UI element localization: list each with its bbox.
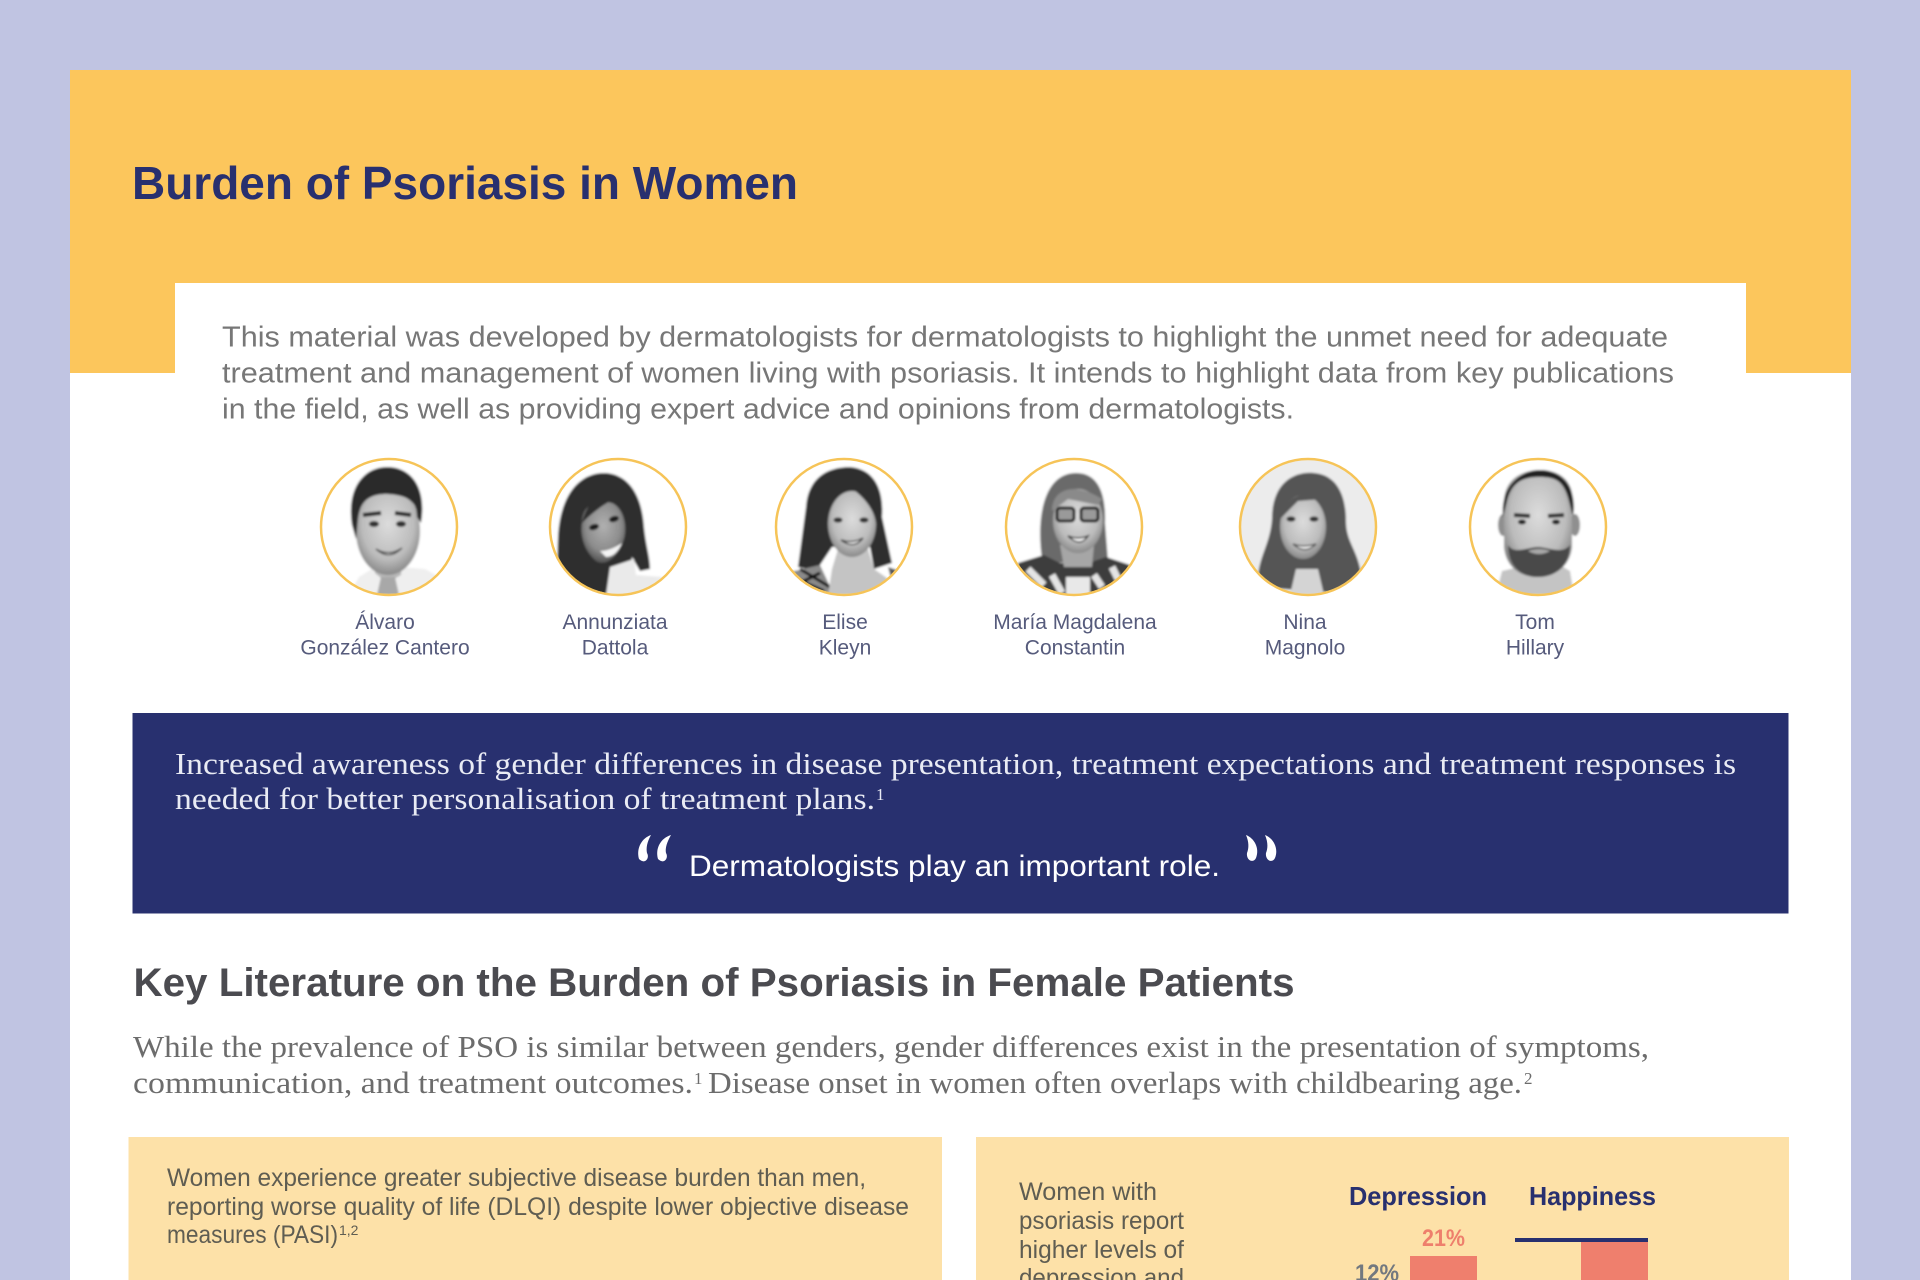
section intro text: Disease onset in women often overlaps with childbearing age.: [708, 1065, 1522, 1100]
title: Burden of Psoriasis in Women: [132, 157, 798, 209]
panel text: Women with: [1019, 1178, 1157, 1206]
header band: [70, 70, 1851, 373]
panel text: measures (PASI): [167, 1221, 338, 1249]
portrait: Annunziata Dattola: [556, 472, 662, 594]
portrait: Elise Kleyn: [793, 466, 896, 594]
name: Annunziata: Dattola: [582, 636, 649, 660]
name: Maria: Constantin: [1025, 636, 1125, 660]
intro text: [222, 322, 1674, 426]
depression bar: [1410, 1256, 1477, 1280]
intro text: in the field, as well as providing expert advice and opinions from dermatologists.: [222, 394, 1294, 426]
section intro text: While the prevalence of PSO is similar between genders, gender differences exist in the presentation of symptoms,: [133, 1029, 1649, 1064]
name: Annunziata: Annunziata: [562, 611, 668, 634]
section intro text: [133, 1029, 1649, 1100]
panel text: reporting worse quality of life (DLQI) despite lower objective disease: [167, 1193, 909, 1221]
value 21%: 21%: [1422, 1225, 1465, 1252]
quote text: Dermatologists play an important role.: [689, 850, 1220, 883]
panel text: 1,2: [339, 1222, 359, 1238]
panel text: [1019, 1178, 1184, 1280]
quote: right mark: [1246, 835, 1276, 861]
portrait: Tom Hillary: [1496, 468, 1582, 594]
portrait: Alvaro Gonzalez Cantero: [349, 466, 435, 594]
panel text: Women experience greater subjective disease burden than men,: [167, 1164, 866, 1192]
portrait ring: Annunziata: [550, 459, 686, 595]
happiness bar: [1581, 1240, 1648, 1280]
name: Elise: Kleyn: [819, 636, 871, 660]
section intro text: 1: [694, 1069, 702, 1088]
portrait ring: Elise: [776, 459, 912, 595]
name: Maria: María Magdalena: [993, 611, 1157, 634]
portrait ring: Nina: [1240, 459, 1376, 595]
name: Tom: Tom: [1515, 611, 1555, 634]
section intro text: communication, and treatment outcomes.: [133, 1065, 693, 1100]
panel text: psoriasis report: [1019, 1207, 1184, 1235]
callout text: 1: [876, 785, 884, 804]
name: Alvaro: Álvaro: [355, 611, 415, 634]
navy callout: [132, 713, 1788, 914]
intro panel: [175, 283, 1746, 438]
section heading: Key Literature on the Burden of Psoriasis in Female Patients: [134, 961, 1294, 1005]
panel text: higher levels of: [1019, 1236, 1184, 1264]
name: Tom: Hillary: [1506, 636, 1565, 660]
portrait: Nina Magnolo: [1240, 459, 1376, 595]
portrait ring: Maria: [1006, 459, 1142, 595]
section intro text: 2: [1524, 1069, 1532, 1088]
portrait ring: Alvaro: [321, 459, 457, 595]
portrait: Maria Magdalena Constantin: [1018, 472, 1130, 594]
chart heading: depression: Depression: [1349, 1181, 1487, 1211]
expert names: [300, 611, 1565, 660]
callout text: Increased awareness of gender differences in disease presentation, treatment expectations and treatment responses is: [175, 746, 1736, 781]
panel: subjective burden: [128, 1137, 942, 1280]
name: Elise: Elise: [822, 611, 868, 634]
callout text: [175, 746, 1736, 816]
name: Nina: Magnolo: [1265, 636, 1345, 660]
portrait ring: Tom: [1470, 459, 1606, 595]
callout text: needed for better personalisation of treatment plans.: [175, 781, 875, 816]
name: Nina: Nina: [1283, 611, 1327, 634]
panel text: [167, 1164, 909, 1249]
panel: depression and happiness: [976, 1137, 1789, 1280]
intro text: This material was developed by dermatologists for dermatologists to highlight the unmet need for adequate: [222, 322, 1668, 354]
name: Alvaro: González Cantero: [300, 636, 470, 660]
quote: left mark: [638, 835, 671, 861]
chart heading: happiness: Happiness: [1529, 1181, 1656, 1211]
happiness comparison line: [1515, 1238, 1648, 1242]
intro text: treatment and management of women living with psoriasis. It intends to highlight data from key publications: [222, 358, 1674, 390]
